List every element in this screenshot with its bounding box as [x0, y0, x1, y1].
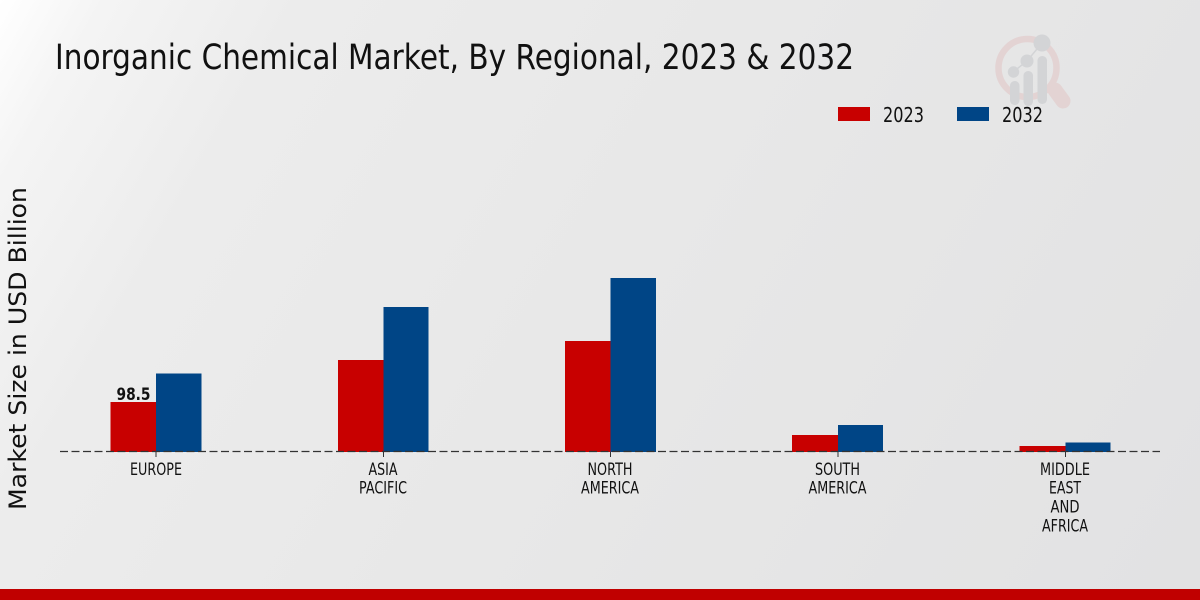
bars: Middle East and Africa [1020, 442, 1110, 452]
label: Middle East and Africa: AND [1050, 498, 1080, 516]
legend: 2032: 2032 [1002, 103, 1043, 127]
label: Asia Pacific [359, 460, 407, 498]
category labels [130, 460, 1090, 536]
label: Middle East and Africa: AFRICA [1042, 516, 1089, 536]
label: Asia Pacific: ASIA [368, 460, 398, 479]
logo watermark [998, 34, 1063, 106]
bars: South America [792, 425, 883, 452]
legend: 2023: 2023 [883, 103, 924, 127]
title: Inorganic Chemical Market, By Regional, 2023 & 2032 [55, 38, 854, 78]
label: Asia Pacific: PACIFIC [359, 478, 407, 498]
label: North America: NORTH [588, 460, 632, 479]
legend: 2023 [838, 103, 924, 127]
label: North America [581, 460, 640, 498]
label: Middle East and Africa [1040, 460, 1090, 536]
footer bar [0, 589, 1200, 600]
bars: North America [565, 278, 656, 452]
data label: 98.5 [116, 385, 150, 404]
label: Middle East and Africa: EAST [1049, 478, 1082, 498]
label: South America: SOUTH [815, 460, 860, 479]
y axis label: Market Size in USD Billion [4, 187, 32, 510]
label: Middle East and Africa: MIDDLE [1040, 460, 1090, 479]
label: South America: AMERICA [808, 478, 867, 498]
label: Europe: EUROPE [130, 460, 182, 479]
legend: 2032 [957, 103, 1043, 127]
bars: Asia Pacific [338, 307, 428, 452]
legend [838, 103, 1043, 127]
label: North America: AMERICA [581, 478, 640, 498]
bar chart [60, 278, 1160, 457]
bars: Europe [110, 374, 202, 452]
label: South America [808, 460, 867, 498]
